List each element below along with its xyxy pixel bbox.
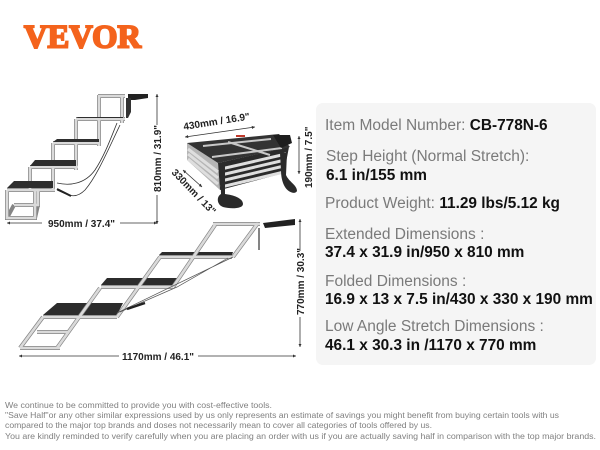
stair treads bbox=[7, 117, 123, 188]
dimension: 950mm / 37.4": 950mm / 37.4" bbox=[48, 219, 115, 230]
spec: extended dimensions: Extended Dimensions : bbox=[325, 226, 484, 243]
dimension: 190mm / 7.5" bbox=[299, 126, 315, 188]
spec: extended dimensions bbox=[325, 226, 524, 261]
footer disclaimer: You are kindly reminded to verify carefully when you are placing an order with us if you are actually saving half in comparison with the top major brands. bbox=[5, 431, 596, 441]
spec: folded dimensions: 16.9 x 13 x 7.5 in/430 x 330 x 190 mm bbox=[325, 291, 593, 308]
dimension: 770mm / 30.3": 770mm / 30.3" bbox=[296, 248, 307, 315]
cables and handle bbox=[57, 123, 120, 196]
folded handle bbox=[273, 135, 292, 148]
spec: step height bbox=[326, 148, 529, 184]
spec: step height: Step Height (Normal Stretch): bbox=[326, 148, 529, 165]
dimension: 430mm / 16.9": 430mm / 16.9" bbox=[183, 112, 251, 133]
spec: folded dimensions: Folded Dimensions : bbox=[325, 273, 466, 290]
red label on folded stairs bbox=[236, 135, 245, 137]
dimension: 810mm / 31.9" bbox=[153, 94, 164, 224]
dimension: 330mm / 13": 330mm / 13" bbox=[169, 167, 218, 217]
illustration: folded stairs bbox=[187, 134, 297, 208]
ramp cables and handle bbox=[117, 257, 233, 313]
spec: low angle stretch dimensions: Low Angle Stretch Dimensions : bbox=[325, 318, 544, 335]
ramp treads bbox=[43, 252, 233, 315]
illustration: extended stairs bbox=[7, 94, 148, 218]
spec: low angle stretch dimensions: 46.1 x 30.3 in /1170 x 770 mm bbox=[325, 337, 536, 354]
folded foot pads bbox=[218, 153, 297, 208]
spec: folded dimensions bbox=[325, 273, 593, 308]
spec: extended dimensions: 37.4 x 31.9 in/950 x 810 mm bbox=[325, 244, 524, 261]
spec: item model number: Item Model Number: CB-778N-6 bbox=[325, 117, 548, 134]
spec: low angle stretch dimensions bbox=[325, 318, 544, 354]
footer disclaimer: compared to the major top brands and doses not necessarily mean to cover all categories of tools offered by us. bbox=[5, 420, 432, 430]
footer disclaimer: We continue to be committed to provide you with cost-effective tools. bbox=[5, 400, 272, 410]
dimension: 190mm / 7.5": 190mm / 7.5" bbox=[304, 126, 315, 188]
spec: step height: 6.1 in/155 mm bbox=[326, 167, 427, 184]
footer disclaimer bbox=[5, 400, 596, 441]
dimension: 810mm / 31.9": 810mm / 31.9" bbox=[153, 125, 164, 192]
illustration: low angle stretched stairs bbox=[20, 219, 295, 348]
dimension: 1170mm / 46.1": 1170mm / 46.1" bbox=[122, 352, 194, 363]
panel: specifications bbox=[316, 103, 596, 365]
logo: VEVOR: VEVOR bbox=[24, 20, 142, 56]
spec: product weight: Product Weight: 11.29 lbs/5.12 kg bbox=[325, 195, 560, 212]
dimension: 770mm / 30.3" bbox=[296, 219, 307, 347]
footer disclaimer: "Save Half"or any other similar expressions used by us only represents an estimate of savings you might benefit from buying certain tools with us bbox=[5, 410, 560, 420]
